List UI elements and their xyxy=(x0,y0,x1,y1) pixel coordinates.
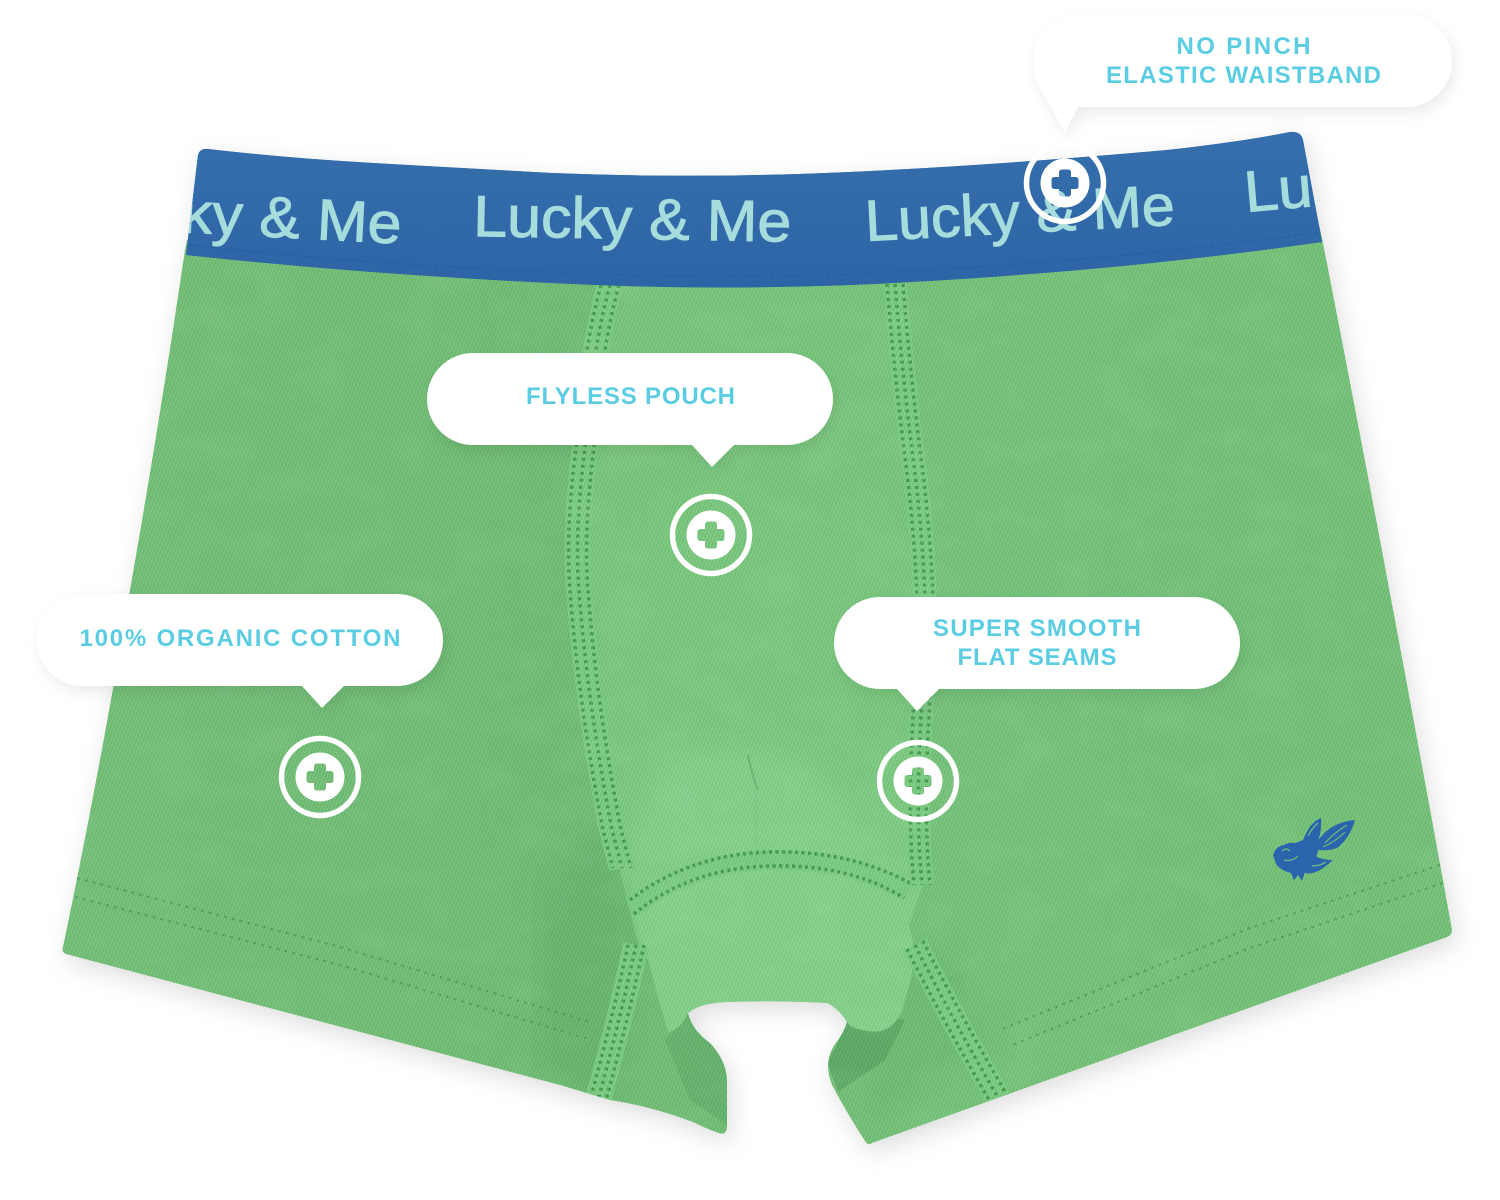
left seam xyxy=(569,285,631,868)
callout label: NO PINCH xyxy=(1176,33,1310,60)
icon: plus marker waistband xyxy=(1026,144,1104,222)
callout label: SUPER SMOOTH xyxy=(933,615,1141,642)
callout label: FLAT SEAMS xyxy=(958,644,1116,671)
front pouch panel and fabric details xyxy=(40,240,1460,1160)
pouch cuff xyxy=(647,926,913,1032)
left hem stitching xyxy=(77,878,590,1022)
crease xyxy=(748,755,758,790)
right seam xyxy=(887,284,933,885)
callout: super smooth flat seams xyxy=(834,597,1240,711)
callout label xyxy=(933,615,1141,671)
icon: plus marker seams xyxy=(880,742,956,820)
icon: blue goldfish logo xyxy=(1273,818,1355,881)
waistband lettering: Lucky & Me xyxy=(82,175,403,257)
callout: 100% organic cotton xyxy=(37,594,443,708)
waistband texture and lettering xyxy=(188,170,1318,277)
icon: plus marker pouch xyxy=(672,496,750,574)
garment body xyxy=(62,132,1452,1144)
icon: plus marker cotton xyxy=(282,738,358,816)
callout label xyxy=(1106,33,1381,89)
callout label: 100% ORGANIC COTTON xyxy=(80,625,400,652)
callout label: ELASTIC WAISTBAND xyxy=(1106,62,1381,89)
cuff stitching xyxy=(630,852,912,914)
waistband repaint above fabric texture xyxy=(186,132,1322,288)
callout: no pinch elastic waistband xyxy=(1033,15,1452,132)
seams xyxy=(75,284,1443,1112)
lower left seam xyxy=(590,945,644,1100)
callout label: FLYLESS POUCH xyxy=(526,383,735,410)
waistband texture and lettering: Lucky & Me xyxy=(863,173,1176,254)
left leg opening underside xyxy=(665,1013,727,1125)
callout: flyless pouch xyxy=(427,353,833,467)
fabric hatch texture xyxy=(40,240,1460,1160)
right hem stitching xyxy=(1000,865,1440,1030)
waistband texture and lettering: Lucky & Me xyxy=(473,184,792,255)
lower right seam xyxy=(907,941,1012,1112)
right leg opening underside xyxy=(827,1015,905,1092)
